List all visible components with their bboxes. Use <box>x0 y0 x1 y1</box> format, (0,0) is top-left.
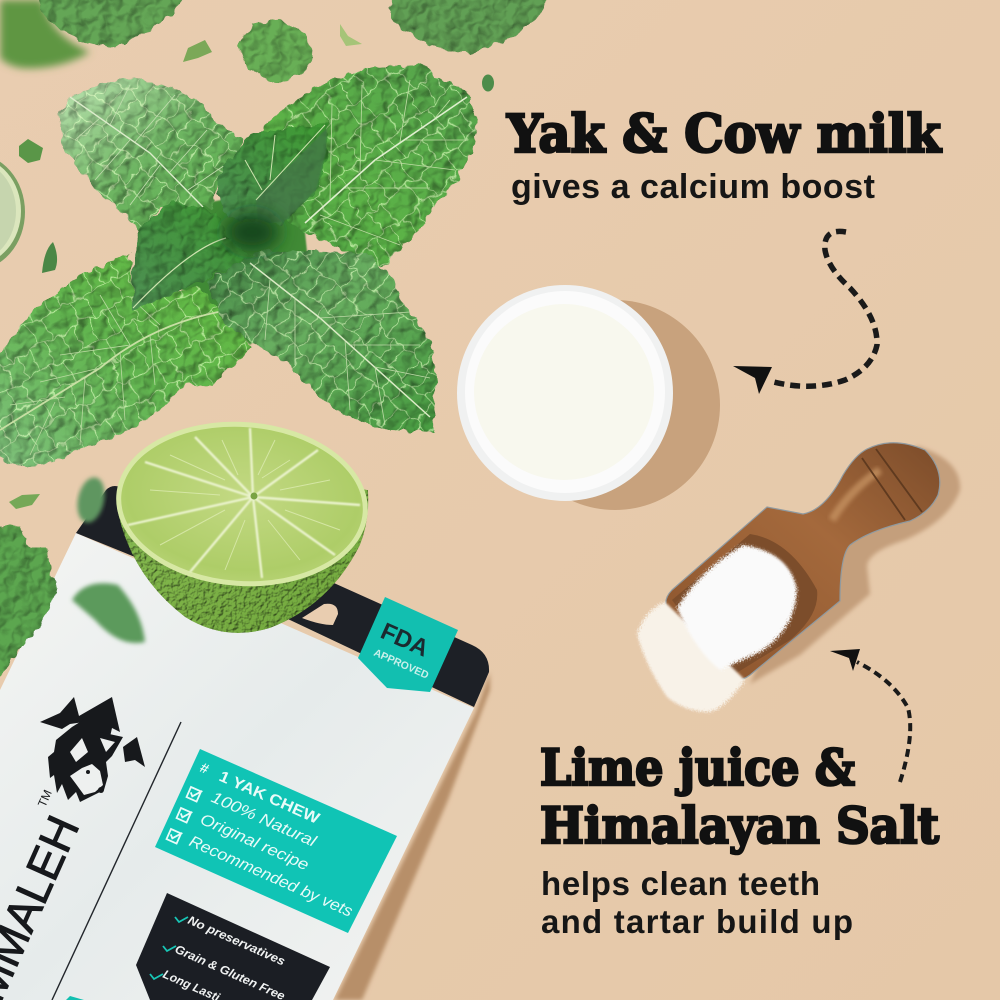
pouch shadow <box>335 672 490 1000</box>
blurred leaf top left <box>0 0 90 68</box>
product pouch <box>0 486 490 1000</box>
pouch hang hole <box>302 604 338 625</box>
sprig centre shadow <box>224 212 280 252</box>
leaf top right <box>390 0 551 54</box>
sprig base fill <box>160 185 310 345</box>
divider line <box>52 722 181 1000</box>
FDA badge: APPROVED <box>372 647 431 682</box>
leaf: small centre <box>132 200 253 310</box>
teal claims panel <box>155 749 397 933</box>
lime centre <box>250 492 258 500</box>
pouch black top band <box>76 486 489 707</box>
leaf bottom left <box>0 526 56 688</box>
scoop inner <box>672 534 817 677</box>
scoop shadow <box>750 446 960 684</box>
leaf fragment <box>42 242 57 273</box>
leaf: small upper centre <box>217 123 328 223</box>
blurred leaf small <box>74 475 108 525</box>
teal claims panel: # <box>198 759 212 777</box>
lime pulp streaks <box>150 440 340 570</box>
lime slice left <box>0 154 25 270</box>
FDA badge <box>358 597 458 692</box>
heading: yak and cow milk: Yak & Cow milk <box>506 104 942 165</box>
leaf fragment <box>183 40 212 62</box>
FDA badge: FDA <box>377 618 433 663</box>
teal claims panel: Original recipe <box>197 811 311 874</box>
teal strip at pouch bottom <box>66 996 84 1000</box>
salt scoop <box>637 443 960 712</box>
milk bowl <box>457 285 720 510</box>
handle highlight <box>832 470 880 520</box>
salt heap <box>677 545 797 670</box>
leaf: lower right <box>207 250 437 432</box>
black benefits panel: No preservatives <box>186 913 288 969</box>
leaf fragment <box>340 24 362 46</box>
handle grooves <box>862 449 922 520</box>
lime segments <box>128 428 360 578</box>
lime rind <box>117 470 368 633</box>
heading: lime juice: Lime juice & <box>540 738 855 797</box>
mint sprig <box>0 65 478 468</box>
bowl rim <box>457 285 673 501</box>
spilled salt <box>637 602 745 712</box>
blurred leaf on pouch <box>72 583 145 643</box>
arrow: to milk bowl <box>733 231 877 394</box>
lime half <box>111 413 373 633</box>
leaf fragment <box>482 74 494 92</box>
small leaf <box>237 20 314 83</box>
milk surface <box>474 304 654 480</box>
teal claims panel: 1 YAK CHEW <box>216 768 322 828</box>
black benefits panel <box>136 893 330 1000</box>
teal claims panel: 100% Natural <box>208 789 319 851</box>
black benefits panel: Grain & Gluten Free <box>173 942 287 1000</box>
heading: himalayan salt: Himalayan Salt <box>540 796 939 855</box>
leaf: upper left <box>60 78 243 233</box>
leaf top <box>38 0 186 48</box>
arrow: to salt scoop <box>830 649 910 782</box>
pouch body <box>0 533 474 1000</box>
text: helps clean teeth: helps clean teeth <box>541 865 820 902</box>
lime cut face <box>111 413 373 595</box>
leaf: upper right <box>253 65 478 267</box>
leaf fragment <box>19 139 43 163</box>
loose mint leaves <box>0 0 551 688</box>
leaf: lower left <box>0 253 252 468</box>
leaf fragment <box>9 494 40 509</box>
brand logo: wolf and mountains <box>40 697 145 802</box>
text: tartar build up: and tartar build up <box>541 903 853 940</box>
teal claims panel: Recommended by vets <box>186 833 355 921</box>
text: calcium boost: gives a calcium boost <box>511 168 875 206</box>
trademark: TM <box>35 788 55 809</box>
bowl shadow <box>510 300 720 510</box>
scoop handle and bowl <box>666 443 940 680</box>
